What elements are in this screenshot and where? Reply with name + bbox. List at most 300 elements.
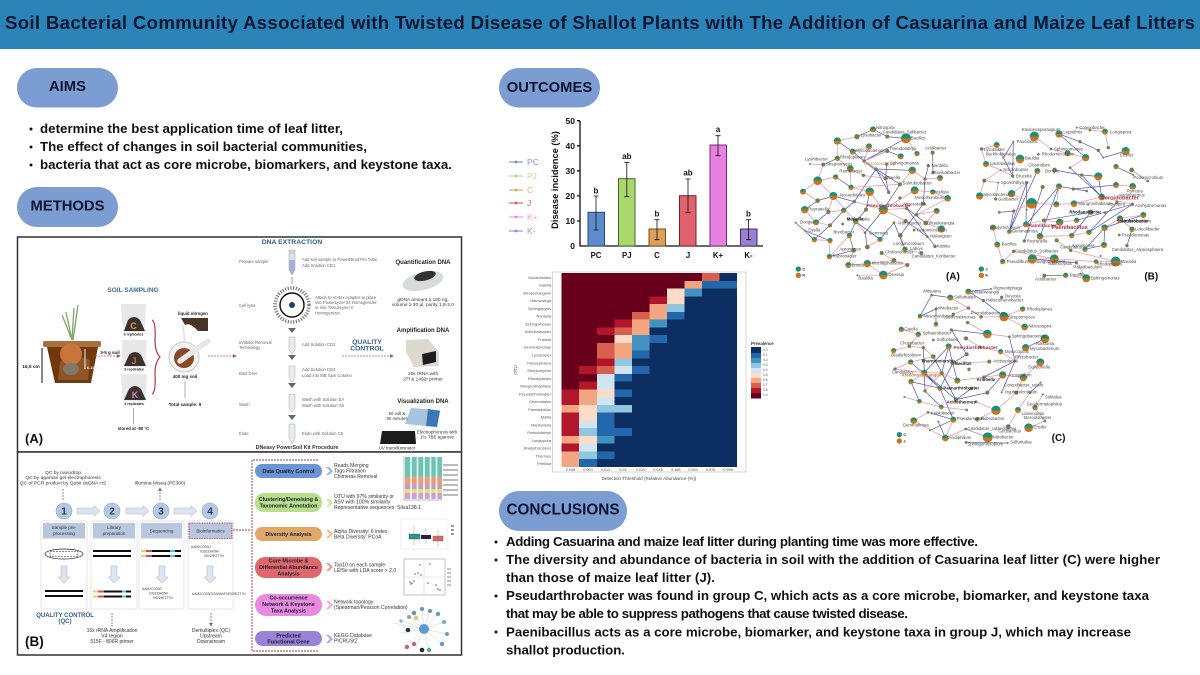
network C: C vs J: Rhodoplanes [1027, 306, 1052, 311]
network C: C vs J: Gaiella [904, 326, 918, 331]
genus labels: Nocardioides [528, 275, 551, 280]
DNA extraction column: Add Solution CD3 [302, 367, 336, 372]
step circles and arrows [56, 503, 218, 519]
network B: J vs K: Pseudilbum [1007, 259, 1030, 264]
network C: C vs J: Arthrobacter [935, 306, 959, 311]
network A: C vs K: Pseudarthrobacter [867, 203, 911, 209]
heading: methods [17, 187, 118, 227]
analysis descriptions: Tags Filtration [334, 468, 366, 474]
analysis pills: Differential Abundance [259, 565, 318, 571]
QC notes [20, 470, 186, 486]
category labels: PC [591, 251, 602, 260]
network A: C vs K: Lysobacter [861, 132, 882, 137]
analysis pills: Predicted [276, 634, 301, 640]
icon: sample bags: 3 replicates [124, 368, 144, 372]
category labels: K+ [713, 251, 724, 260]
step circles and arrows: 4 [207, 506, 213, 518]
step cards: AAMXG333G033A5NF0S029F2T7N [192, 592, 246, 596]
network B: J vs K: (B) [1144, 272, 1158, 283]
network B: J vs K: Pantoea [1127, 188, 1143, 193]
network B: J vs K: Longispora [1110, 129, 1132, 134]
bar chart: disease incidence [509, 116, 763, 260]
network C: C vs J: Mesorhizobium [923, 313, 953, 318]
threshold labels: 0.006 [566, 468, 575, 472]
network B: J vs K: Rhodoplanes [1097, 262, 1122, 267]
network C: C vs J: Chujaibacter [900, 340, 925, 345]
genus labels: Gaiella [539, 283, 552, 288]
label A: (A) [25, 431, 43, 446]
network B: J vs K: Singulisphaera [1037, 259, 1066, 264]
genus labels: Mallia [541, 415, 552, 420]
mini network [393, 607, 449, 652]
network C: C vs J: Acidothermus [947, 400, 976, 405]
network B: J vs K: Bradyrhizobium [990, 225, 1020, 230]
network B: J vs K: Brucella [1016, 174, 1032, 179]
network A: C vs K: Arthrobacter [897, 220, 922, 225]
DNA extraction column: Elute with Solution C6 [302, 431, 344, 436]
network B: J vs K: Nannocystis [1048, 261, 1072, 266]
heading: aims [17, 68, 118, 108]
mini stacked bars [404, 456, 458, 500]
step cards: 0S029F2T7N [153, 596, 173, 600]
network B: J vs K: Burkholderiales [986, 152, 1016, 157]
step cards: 033333A5NF [149, 592, 168, 596]
legend: PJ [527, 171, 537, 181]
icon: sample bags: K [132, 390, 139, 400]
network C: C vs J: Thermomicrobia [922, 358, 956, 363]
network B: J vs K: Candidatus_Solibacter [1015, 248, 1059, 253]
amplification DNA: 27f & 1492r primer [403, 376, 443, 382]
network C: C vs J: Candidatus_Udaeobacter [967, 426, 1017, 431]
network C: C vs J: Kribbella [977, 377, 996, 382]
significance letters: b [594, 186, 599, 196]
network B: J vs K: Geobacter [998, 196, 1019, 201]
icon: sample bags: J [131, 356, 137, 366]
network A: C vs K: Gaiella [887, 175, 901, 180]
quantification DNA: Quantification DNA [396, 260, 451, 266]
prevalence colour legend: 0.1 [763, 353, 768, 357]
network C: C vs J: (C) [1052, 433, 1066, 444]
conclusions list: shallot production. [506, 642, 625, 658]
aims list: bacteria that act as core microbe, biomarkers, and keystone taxa. [40, 157, 452, 172]
conclusions list: Adding Casuarina and maize leaf litter during planting time was more effective. [506, 534, 978, 549]
network A: C vs K: Labrys [910, 246, 923, 251]
prevalence colour legend: 1.0 [763, 393, 768, 397]
genus labels: Pirellula [537, 461, 552, 466]
network C: C vs J: Pigmentiphaga [993, 285, 1023, 290]
network C: C vs J: Gemmatimonas [945, 315, 976, 320]
soil sampling heading: SOIL SAMPLING [107, 287, 159, 294]
network A: C vs K: Bosea [852, 263, 865, 268]
network B: J vs K: Bacillus [1002, 242, 1017, 247]
prevalence colour legend: 0.5 [763, 373, 768, 377]
genus labels: Mantoniella [531, 422, 552, 427]
DNA extraction column: Bind DNA [239, 371, 258, 376]
step cards: 0S029F2T7N [204, 554, 224, 558]
genus labels: Pseudolabrys [527, 430, 551, 435]
amplification DNA [397, 328, 450, 382]
step cards: Sequencing [150, 528, 174, 534]
OTU axis title: OTU [513, 365, 518, 375]
DNA extraction column: DNeasy PowerSoil Kit Procedure [256, 445, 338, 451]
legend: J [527, 198, 531, 208]
visualization DNA: Visualization DNA [397, 399, 449, 405]
label B: (B) [25, 634, 44, 649]
QC label and lower notes: V4 region [101, 634, 123, 640]
network A: C vs K: Rhodoplanes [840, 154, 866, 159]
network C: C vs J: Dokdonella [1028, 364, 1051, 369]
genus labels: Sphingomonas [525, 322, 551, 326]
network C: C vs J: Sulfuritalea [1010, 440, 1032, 445]
network A: C vs K: Chthonobacter [885, 250, 914, 255]
network A: C vs K: Ohtaekwangia [927, 220, 955, 225]
icon: sample bags: 3 replicates [124, 332, 143, 336]
DNA extraction column: Attach to Vortex Adapter or place [315, 295, 377, 300]
network C: C vs J: Bacillus [955, 361, 972, 366]
network B: J vs K: Mangrovihabitans [1078, 201, 1112, 206]
bar chart: disease incidence: 20 [566, 191, 575, 201]
amplification DNA: 16s rRNA with [408, 371, 439, 377]
threshold labels [566, 468, 733, 472]
icon: mortar and pestle: 400 mg soil [173, 374, 197, 379]
significance letters [594, 125, 751, 218]
x axis title: Detection Threshold (Relative Abundance (%)) [602, 476, 697, 481]
prevalence colour legend: 0.0 [763, 348, 768, 352]
amplification DNA: Amplification DNA [397, 328, 450, 334]
analysis pills: Taxonomic Annotation [260, 504, 317, 510]
network A: C vs K: Ramlibacter [839, 169, 863, 174]
analysis pills: Clustering/Denoising & [259, 497, 318, 503]
bar chart: disease incidence: 10 [566, 216, 575, 226]
network B: J vs K: Massilia [1121, 259, 1137, 264]
network A: C vs K: Gemmata [869, 230, 889, 235]
bars [588, 212, 604, 246]
network C: C vs J: Paenarthrobacter [943, 386, 979, 391]
network C: C vs J [891, 285, 1066, 447]
network A: C vs K: Bauldia [858, 276, 873, 281]
network C: C vs J: Nitrosospira [1028, 324, 1052, 329]
network A: C vs K: Solirubrobacter [903, 180, 933, 185]
network A: C vs K: Lysinibacter [805, 156, 828, 161]
quality control arrow [342, 339, 393, 356]
icon: sample bags: C [130, 321, 137, 331]
aims list: determine the best application time of leaf litter, [40, 121, 343, 136]
DNA extraction column: into PowerLyzer 24 Homogenizer [315, 300, 377, 305]
prevalence colour legend: 0.2 [763, 358, 768, 362]
network A: C vs K: Longimicrobium [893, 241, 924, 246]
analysis pills: Co-occurrence [269, 596, 308, 602]
threshold labels: 0.576 [706, 468, 715, 472]
network B: J vs K: Paenibacillus [1052, 225, 1088, 231]
panel A: DNA workflow [18, 237, 462, 452]
analysis pills: Taxa Analysis [271, 608, 306, 614]
network C: C vs J: J [903, 438, 906, 443]
network C: C vs J: Geodermatophilus [1027, 402, 1062, 407]
category labels: K- [744, 251, 753, 260]
threshold labels: 0.168 [671, 468, 680, 472]
analysis descriptions: Chimeras Removal [334, 474, 377, 480]
network C: C vs J: Rubrobacter [981, 416, 1005, 421]
network A: C vs K: Candidatus_Solibacter [883, 129, 927, 134]
genus labels: Streptomyces [527, 368, 551, 373]
arrow: soil to bags [92, 350, 120, 356]
legend: K- [527, 226, 536, 236]
genus labels: Longispora [532, 438, 552, 443]
QC label and lower notes: 515F - 806R primer [90, 639, 134, 645]
DNA extraction column: Technology [239, 345, 261, 350]
analysis descriptions: Reads Merging [334, 463, 369, 469]
network C: C vs J: Kaistobacter [931, 410, 955, 415]
step cards: processing [53, 531, 75, 536]
significance letters: ab [683, 168, 693, 178]
icon: sample bags [118, 304, 149, 431]
network C: C vs J: Bradyrhizobium [891, 352, 921, 357]
bar chart: disease incidence: Disease incidence (%) [550, 131, 560, 229]
network A: C vs K: Mesorhizobium [915, 195, 945, 200]
network C: C vs J: Gemmatirosa [903, 423, 929, 428]
network B: J vs K: Bauldia [1025, 156, 1040, 161]
network B: J vs K: Pseudomonas [1122, 232, 1149, 237]
network B: J vs K: Ktedonosporangium [1022, 127, 1061, 132]
prevalence colour legend: 0.6 [763, 378, 768, 382]
QC notes: QC by agarose gel electrophoresis [25, 475, 101, 481]
network B: J vs K: Dongia [1045, 169, 1059, 174]
network C: C vs J: Luteimonas [1022, 411, 1044, 416]
genus labels: Paenibacillus [528, 407, 551, 412]
analysis pills: Diversity Analysis [265, 532, 312, 538]
network C: C vs J: Devosia [1005, 294, 1021, 299]
network C: C vs J: Solitalea [1045, 394, 1062, 399]
heatmap cells [562, 273, 737, 467]
network A: C vs K: (A) [946, 272, 960, 283]
quantification DNA: volume ≥ 30 µl, purity 1,8-2,0 [392, 302, 454, 308]
heading: conclusions [499, 491, 627, 531]
network B: J vs K: Clostridium [1028, 163, 1050, 168]
network A: C vs K: K [802, 273, 805, 278]
network A: C vs K: Rubrobacter [833, 254, 857, 259]
analysis descriptions: Alpha Diversity: 6 index [334, 529, 388, 535]
genus labels: Gemmatimonas [524, 345, 551, 350]
network C: C vs J: Nitrobacter [993, 434, 1014, 439]
quantification DNA [392, 260, 454, 308]
network B: J vs K [976, 125, 1166, 283]
network A: C vs K: Bacillus [911, 135, 926, 140]
step cards: Bioinformatics [196, 528, 225, 534]
network A: C vs K: Pirellula [933, 190, 949, 195]
network A: C vs K: Nocardioides [840, 192, 865, 197]
network B: J vs K: Lactobacillus [990, 161, 1015, 166]
prevalence colour legend [751, 341, 774, 398]
network C: C vs J: Actinoplanes [993, 359, 1018, 364]
icon: potted shallot [22, 305, 102, 383]
DNA extraction column: Inhibitor Removal [239, 340, 272, 345]
network C: C vs J: Haliscomenobacter [986, 298, 1024, 303]
network C: C vs J: Sulfuritalea [954, 295, 976, 300]
step cards: Sample pre- [52, 525, 77, 530]
network A: C vs K: Nitrospira [876, 125, 895, 130]
network B: J vs K: Ramlibacter [1028, 223, 1057, 229]
conclusions list: than those of maize leaf litter (J). [506, 570, 715, 585]
network A: C vs K: Massilia [847, 217, 864, 222]
icon: mortar and pestle [169, 311, 208, 407]
DNA extraction column: Wash with Solution C5 [302, 403, 345, 408]
visualization DNA: 50 minutes [386, 416, 408, 421]
genus labels: Thermus [536, 453, 551, 458]
legend: C [527, 185, 533, 195]
title banner [0, 0, 1200, 49]
genus labels: Solirubrobacter [525, 329, 552, 334]
step circles and arrows: 1 [61, 506, 67, 518]
significance letters: a [716, 125, 721, 134]
network B: J vs K: Pirellula [1070, 272, 1086, 277]
analysis descriptions: (Spearman/Pearson Correlation) [334, 605, 408, 611]
bar chart: disease incidence: 40 [566, 141, 575, 151]
icon: sample bags: 3 replicates [124, 402, 144, 406]
category labels: C [654, 251, 660, 260]
category labels: J [686, 251, 690, 260]
DNA extraction column [239, 239, 378, 451]
analysis pills: Core Microbe & [269, 558, 309, 564]
panel B: bioinformatics workflow [18, 452, 462, 655]
threshold labels: 0.996 [723, 468, 733, 472]
analysis descriptions: Top10 on each sample [334, 562, 385, 568]
DNA extraction column: Elute [239, 431, 249, 436]
analysis descriptions: KEGG Database [334, 633, 372, 639]
network B: J vs K: Mycobacterium [983, 192, 1013, 197]
network A: C vs K: Pseudolabrys [890, 146, 916, 151]
QC label and lower notes: Upstream [200, 634, 222, 640]
brace [152, 320, 160, 394]
analysis descriptions: PICRUSt2 [334, 638, 358, 644]
network A: C vs K: Micromonospora [864, 161, 897, 166]
genus labels: Frankia [538, 337, 552, 342]
analysis descriptions: Representative sequences: Silva138.1 [334, 505, 421, 511]
network A: C vs K: Dyella [808, 228, 821, 233]
network B: J vs K: Acidothermus [1118, 192, 1145, 197]
network C: C vs J: Hyphomicrobium [1005, 389, 1038, 394]
aims list: The effect of changes in soil bacterial communities, [40, 139, 367, 154]
heading: conclusions: CONCLUSIONS [506, 502, 620, 518]
conclusions list: that may be able to suppress pathogens that cause twisted disease. [506, 606, 908, 621]
network A: C vs K: Mycobacterium [855, 148, 885, 153]
genus labels: Nitrosovirga [530, 298, 552, 303]
significance letters: ab [622, 152, 632, 161]
network B: J vs K: Sphingomonas [1054, 146, 1083, 151]
quality control arrow: QUALITY [352, 339, 382, 346]
network A: C vs K: Devosia [888, 272, 905, 277]
network C: C vs J: Geobacillus [998, 428, 1021, 433]
network B: J vs K: Pedomicrobium [1133, 175, 1164, 180]
analysis descriptions: OTU with 97% similarity or [334, 494, 394, 500]
network A: C vs K: Kaistia [937, 244, 950, 249]
network A: C vs K: Acidibacter [925, 145, 947, 150]
network B: J vs K: Azohydromonas [1135, 203, 1166, 208]
prevalence colour legend: 0.3 [763, 363, 768, 367]
step cards: Library [107, 525, 122, 530]
network B: J vs K: Azospira [1108, 202, 1126, 207]
network B: J vs K: Sphingomonas [1091, 276, 1120, 281]
bar chart: disease incidence: 50 [566, 116, 575, 126]
network A: C vs K: Streptomyces [826, 162, 852, 167]
network C: C vs J: Myxococcus [1005, 349, 1029, 354]
DNA extraction column: Add soil sample to PowerBead Pro Tube [302, 257, 378, 262]
conclusions list: Paenibacillus acts as a core microbe, biomarker, and keystone taxa in group J, which may increase [506, 624, 1131, 640]
visualization DNA: 1% TBE agarose [420, 434, 454, 440]
network C: C vs J: Ktedonosporangium [902, 373, 944, 378]
analysis pills: Analysis [277, 572, 300, 578]
genus labels: Lysobacter [532, 352, 552, 358]
bar chart: disease incidence: 30 [566, 166, 575, 176]
network C: C vs J: Sphaerobacter [923, 330, 952, 335]
network B: J vs K: Rhodanobacter [1069, 210, 1101, 215]
network C: C vs J: Pseudarthrobacter [953, 345, 998, 351]
visualization DNA: 50 volt & [389, 411, 405, 416]
heatmap: core microbiome prevalence [513, 272, 774, 481]
genus labels: Mangrovihabitans [520, 384, 551, 388]
network C: C vs J: Azospirillum [1008, 373, 1032, 378]
network A: C vs K: Sphingomonas [890, 161, 919, 166]
significance letters: b [655, 210, 660, 218]
axes [577, 121, 763, 246]
aims list [30, 121, 452, 172]
step circles and arrows: 2 [109, 506, 115, 518]
QC label and lower notes [36, 613, 231, 645]
network B: J vs K: Candidatus [1060, 244, 1082, 249]
network A: C vs K: Candidatus_Koribacter [912, 253, 956, 258]
icon: potted shallot: 6-10 cm [87, 366, 102, 370]
threshold labels: 0.012 [601, 468, 610, 472]
step cards: AAMXG333G [191, 545, 211, 549]
network C: C vs J: Conexibacter_solani [1004, 382, 1043, 387]
network B: J vs K: Reyranella [1027, 238, 1048, 243]
network B: J vs K: Sporichthya [1001, 180, 1024, 185]
network A: C vs K: Pedomicrobium [917, 228, 947, 233]
DNA extraction column: Wash [239, 402, 250, 407]
analysis descriptions: Network topology [334, 600, 374, 606]
genus labels: Planosphaera [527, 360, 552, 365]
network A: C vs K: Agromyces [839, 246, 861, 251]
QC notes: Illumina Miseq (PE300) [135, 480, 186, 486]
network B: J vs K: Rhodomicrobium [1042, 152, 1075, 157]
genus labels: Bradyrhizobium [524, 446, 551, 451]
DNA extraction column: Load into MB Spin Column [302, 373, 352, 378]
network A: C vs K: Haliangium [930, 234, 952, 239]
network B: J vs K: K [985, 273, 988, 278]
threshold labels: 0.304 [688, 468, 698, 472]
step circles and arrows: 3 [158, 506, 164, 518]
genus labels: Nordella [536, 314, 552, 319]
network C: C vs J: Sphingomicrobium [967, 442, 1004, 447]
network B: J vs K: Ensifer [1120, 152, 1134, 157]
genus labels: Rhodoplanes [528, 376, 551, 381]
threshold labels: 0.046 [653, 468, 663, 472]
QC label and lower notes: QUALITY CONTROL [36, 613, 94, 619]
network B: J vs K: Acidibacter [1035, 276, 1057, 281]
network C: C vs J: Candidatus [892, 369, 914, 374]
network A: C vs K: Flavisolibacter [933, 170, 961, 175]
genus labels: Intrasporangium [523, 290, 551, 295]
legend: K+ [527, 212, 538, 222]
step cards: AAMXG333G [142, 587, 162, 591]
visualization DNA: UV transilluminator [379, 446, 416, 450]
analysis descriptions [334, 463, 421, 644]
network B: J vs K: Paucilalea [1017, 139, 1037, 144]
icon: potted shallot: 16,5 cm [22, 364, 40, 370]
prevalence colour legend: 0.8 [763, 388, 768, 392]
visualization DNA [379, 399, 458, 450]
network A: C vs K: Nitrosotalea [903, 202, 927, 207]
icon: sample bags: stored at -80 °C [118, 426, 149, 431]
